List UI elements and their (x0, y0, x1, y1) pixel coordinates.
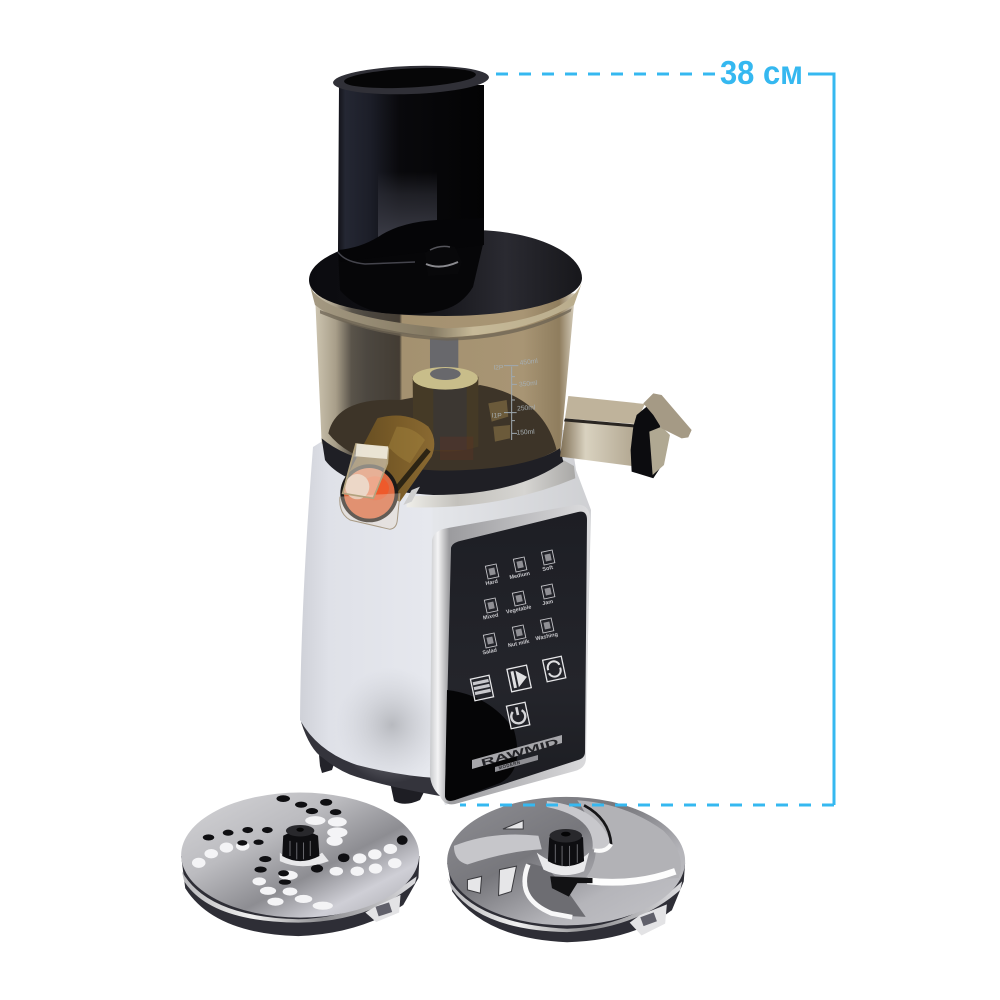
icon: feet (319, 755, 424, 804)
scale marks (504, 366, 518, 440)
centre column cap (413, 367, 478, 390)
light right sector (577, 800, 681, 880)
centre shaft (430, 338, 458, 380)
programme labels: Hard (485, 579, 499, 587)
scale labels: 250ml (517, 404, 536, 413)
scale labels: 350ml (519, 380, 538, 389)
floor gears (488, 400, 510, 442)
jar floor (328, 385, 557, 472)
programme labels: Nut milk (508, 639, 531, 649)
grater holes (192, 795, 408, 910)
disc hub (537, 829, 589, 875)
icon: menu button (470, 675, 494, 701)
disc top (447, 797, 685, 925)
disc hub (280, 825, 329, 866)
programme labels: Soft (542, 565, 554, 573)
icon: refresh button (543, 656, 566, 682)
scale labels: 450ml (519, 358, 539, 367)
black blade shadow (550, 876, 592, 897)
feed tube (333, 63, 489, 264)
height dimension line (460, 54, 834, 805)
lid (309, 230, 582, 316)
lid knob (425, 246, 462, 276)
scale labels: I1P (492, 412, 502, 419)
programme labels: Washing (535, 632, 559, 642)
clear flap (340, 493, 400, 529)
dark lower ring (322, 438, 563, 495)
orange cap (340, 464, 398, 522)
programme icons (483, 550, 555, 648)
disc top (181, 793, 419, 918)
scale labels (492, 358, 539, 437)
centre column (413, 377, 478, 452)
jar body (315, 293, 575, 487)
dimension label: 38 см (720, 54, 803, 91)
black clip (631, 407, 663, 478)
brand strip (472, 735, 562, 769)
tube rim (333, 63, 489, 97)
blades (454, 801, 675, 917)
clear right flap (643, 393, 692, 438)
disc window marks (467, 821, 523, 896)
scale labels: I2P (493, 364, 504, 371)
programme labels: Jam (542, 599, 554, 607)
programme labels: Vegetable (506, 604, 532, 616)
programme labels (482, 565, 559, 656)
programme labels: Mixed (483, 612, 499, 622)
left spout (343, 416, 434, 502)
model name: MODERN (498, 760, 521, 770)
programme labels: Medium (509, 571, 531, 581)
disc: slicing (447, 797, 685, 942)
control panel frame (430, 505, 590, 804)
silver shoulder band (407, 460, 575, 508)
model strip (495, 755, 538, 772)
scale labels: 150ml (516, 429, 535, 437)
icon: power button (506, 702, 530, 729)
programme labels: Salad (482, 648, 498, 656)
panel glass (445, 512, 587, 801)
brand name: RAWMID (480, 737, 560, 769)
juicer base (300, 430, 591, 805)
panel reflection (445, 690, 517, 801)
disc: grating (181, 793, 419, 936)
icon: play button (507, 665, 531, 692)
amber rim (309, 283, 582, 337)
container: amber juice jar (309, 283, 692, 529)
right spout (565, 396, 645, 424)
